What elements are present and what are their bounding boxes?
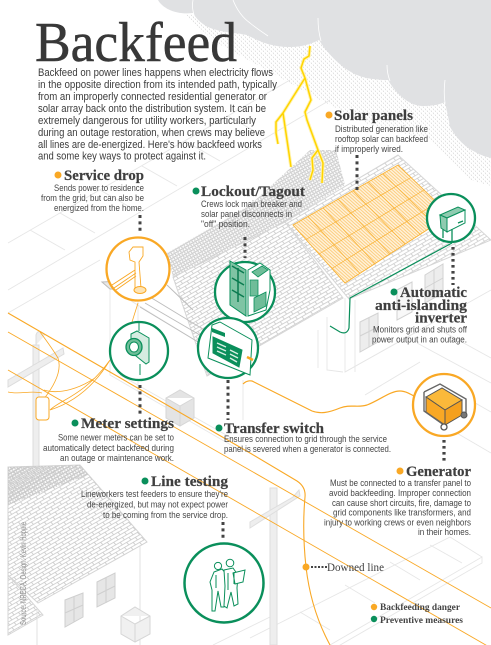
right utility pole xyxy=(250,488,300,645)
label: service drop xyxy=(41,168,144,214)
label: inverter: anti-islanding xyxy=(375,298,468,314)
label: line testing: Line testing xyxy=(151,474,229,490)
label: inverter: Monitors grid and shuts off xyxy=(373,324,467,336)
house: walls xyxy=(110,288,491,452)
cloud shadow stipple xyxy=(185,10,491,186)
label: transfer switch: Transfer switch xyxy=(224,421,325,437)
label: solar panels: Solar panels xyxy=(334,108,413,124)
icon: transfer switch circle xyxy=(198,318,258,378)
house: right wing roof xyxy=(285,155,491,299)
house: far roof shingles xyxy=(167,150,345,277)
label: line testing: Lineworkers test feeders to ensure they're xyxy=(81,489,228,500)
label: generator xyxy=(324,464,471,538)
intro text: from an improperly connected residential generator or xyxy=(38,91,267,103)
label: inverter: power output in an outage. xyxy=(372,334,467,346)
label: downed line: Downed line xyxy=(327,562,384,574)
icon: service drop circle xyxy=(106,238,170,300)
label: inverter xyxy=(372,285,468,346)
label: solar panels: rooftop solar can backfeed xyxy=(335,134,428,145)
label: lockout/tagout: Crews lock main breaker and xyxy=(201,199,302,210)
title: Backfeed xyxy=(35,12,237,74)
label: transfer switch xyxy=(216,421,391,455)
label: line testing xyxy=(81,474,229,521)
label: meter settings: automatically detect backfeed during xyxy=(43,443,174,454)
right roof bricks xyxy=(285,155,491,299)
green conduit xyxy=(330,243,452,333)
label: inverter: inverter xyxy=(415,310,467,326)
intro text: and some key ways to protect against it. xyxy=(38,150,206,162)
legend: Preventive measures xyxy=(380,615,463,625)
label: solar panels: if improperly wired. xyxy=(335,144,403,155)
house: main roof xyxy=(173,222,343,376)
label: meter settings: Meter settings xyxy=(81,416,174,432)
intro text xyxy=(38,67,278,162)
legend xyxy=(371,602,463,625)
label: lockout/tagout xyxy=(192,184,305,230)
generator wire xyxy=(243,381,425,413)
intro text: during an outage restoration, when crews may believe xyxy=(38,127,265,139)
label: inverter: Automatic xyxy=(400,285,467,301)
service wires and transformer xyxy=(8,303,138,420)
solar panels xyxy=(293,165,450,283)
label: service drop: Service drop xyxy=(64,168,144,184)
intro text: all lines are de-energized. Here's how backfeed works xyxy=(38,139,263,151)
label: generator: in their homes. xyxy=(418,527,471,538)
lightning bolt xyxy=(276,46,323,183)
icon: lockout circle xyxy=(215,261,275,322)
label: lockout/tagout: Lockout/Tagout xyxy=(201,184,305,200)
label: service drop: energized from the home. xyxy=(54,203,144,214)
legend: Backfeeding danger xyxy=(380,602,460,612)
label: solar panels xyxy=(326,108,428,155)
icon: lineworkers circle xyxy=(184,544,264,622)
label: service drop: Sends power to residence xyxy=(54,183,144,194)
intro text: in the opposite direction from its intended path, typically xyxy=(38,79,278,91)
icon: inverter circle xyxy=(427,194,475,242)
icon: meter circle xyxy=(110,322,168,380)
power lines xyxy=(8,313,491,645)
house windows xyxy=(121,264,443,358)
source credit: Source: NRECA; Design: Kevin Hopple xyxy=(19,522,28,625)
label: solar panels: Distributed generation like xyxy=(335,124,428,135)
label: lockout/tagout: solar panel disconnects in xyxy=(201,209,292,220)
label: lockout/tagout: "off" position. xyxy=(201,219,250,230)
intro text: extremely dangerous for utility workers, particularly xyxy=(38,115,257,127)
label: service drop: from the grid, but can also be xyxy=(41,193,144,204)
label: meter settings: an outage or maintenance work. xyxy=(60,453,174,464)
left utility pole xyxy=(8,332,64,467)
main roof bricks xyxy=(173,222,343,376)
label: meter settings: Some newer meters can be set to xyxy=(58,432,174,444)
intro text: solar array back onto the distribution system. It can be xyxy=(38,103,266,115)
label: meter settings xyxy=(43,416,174,464)
lower left neighbor house xyxy=(8,465,150,645)
icon: generator circle xyxy=(413,374,475,436)
dotted leaders xyxy=(140,155,453,567)
storm cloud xyxy=(158,0,491,158)
air conditioner xyxy=(166,390,194,426)
label: transfer switch: panel is severed when a generator is connected. xyxy=(224,444,391,455)
label: transfer switch: Ensures connection to grid through the service xyxy=(224,434,387,445)
label: generator: Generator xyxy=(406,464,471,480)
label: downed line xyxy=(302,562,384,574)
label: line testing: de-energized, but may not expect power xyxy=(87,500,229,510)
label: line testing: to be coming from the service drop. xyxy=(103,510,228,521)
roof gable strips xyxy=(102,280,206,345)
intro text: Backfeed on power lines happens when electricity flows xyxy=(38,67,274,79)
